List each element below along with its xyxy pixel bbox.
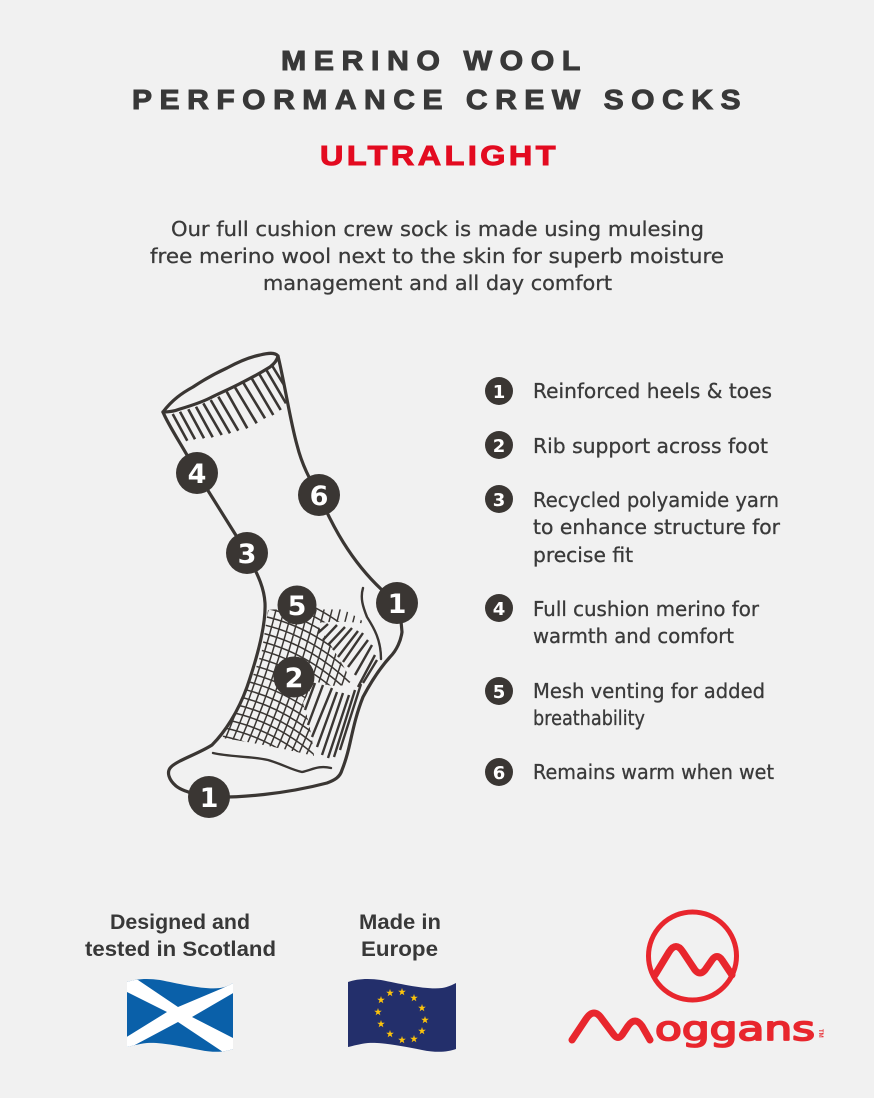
item 6 bbox=[485, 758, 774, 786]
logo circle emblem bbox=[648, 912, 736, 1000]
item 5 bbox=[485, 677, 765, 730]
icon: Scottish flag bbox=[127, 979, 233, 1052]
caption: designed in Scotland bbox=[85, 911, 276, 961]
item 4: warmth and comfort bbox=[533, 624, 734, 648]
logo: Moggans bbox=[572, 912, 823, 1048]
marker 2 bbox=[274, 656, 314, 698]
marker 6 bbox=[298, 474, 340, 516]
subtitle: ultralight: ULTRALIGHT bbox=[320, 140, 559, 171]
marker 1 heel: 1 bbox=[388, 589, 406, 620]
marker 1 heel bbox=[376, 582, 418, 624]
marker 4: 4 bbox=[188, 459, 206, 490]
item 3: to enhance structure for bbox=[533, 515, 781, 539]
rib support lines bbox=[305, 624, 377, 758]
caption: made in Europe bbox=[359, 911, 441, 961]
item 6: 6 bbox=[493, 763, 505, 784]
caption: made in Europe: Made in bbox=[359, 911, 441, 934]
caption: made in Europe: Europe bbox=[361, 938, 438, 961]
feature list bbox=[485, 377, 781, 786]
item 3: 3 bbox=[493, 490, 505, 511]
caption: designed in Scotland: Designed and bbox=[110, 911, 250, 934]
marker 5 bbox=[278, 586, 316, 624]
item 5: Mesh venting for added bbox=[533, 679, 765, 703]
item 4: 4 bbox=[493, 599, 505, 620]
marker 3: 3 bbox=[238, 539, 256, 570]
item 3: precise fit bbox=[533, 543, 633, 567]
marker 3 bbox=[226, 532, 268, 574]
title: MERINO WOOL bbox=[281, 45, 588, 76]
marker 2: 2 bbox=[285, 663, 303, 694]
logo mountain M bbox=[572, 1013, 650, 1040]
intro paragraph bbox=[150, 217, 724, 295]
marker 6: 6 bbox=[310, 481, 328, 512]
item 5: 5 bbox=[493, 682, 505, 703]
item 2: 2 bbox=[493, 436, 505, 457]
item 6: Remains warm when wet bbox=[533, 760, 774, 784]
intro paragraph: management and all day comfort bbox=[263, 271, 612, 295]
item 3: Recycled polyamide yarn bbox=[533, 488, 779, 512]
item 5: breathability bbox=[533, 706, 645, 730]
mesh panel bbox=[222, 608, 362, 756]
marker 5: 5 bbox=[288, 591, 306, 622]
item 1: 1 bbox=[493, 382, 505, 403]
item 3 bbox=[485, 485, 781, 567]
intro paragraph: Our full cushion crew sock is made using mulesing bbox=[171, 217, 704, 241]
sock diagram bbox=[163, 353, 418, 818]
item 2: Rib support across foot bbox=[533, 434, 768, 458]
cuff ribbing bbox=[173, 365, 286, 441]
sock outline bbox=[163, 353, 402, 797]
heel and toe detail lines bbox=[213, 588, 381, 772]
marker 1 toe: 1 bbox=[200, 783, 218, 814]
logo wordmark: oggans bbox=[655, 1009, 815, 1048]
item 1: Reinforced heels & toes bbox=[533, 379, 772, 403]
item 4: Full cushion merino for bbox=[533, 597, 760, 621]
title: PERFORMANCE CREW SOCKS bbox=[132, 84, 748, 115]
caption: designed in Scotland: tested in Scotland bbox=[85, 938, 276, 961]
icon: EU flag bbox=[348, 979, 456, 1052]
logo trademark: TM bbox=[817, 1029, 823, 1038]
marker 4 bbox=[176, 452, 218, 494]
item 4 bbox=[485, 594, 760, 648]
intro paragraph: free merino wool next to the skin for superb moisture bbox=[150, 244, 724, 268]
title bbox=[132, 45, 748, 115]
marker 1 toe bbox=[188, 776, 230, 818]
